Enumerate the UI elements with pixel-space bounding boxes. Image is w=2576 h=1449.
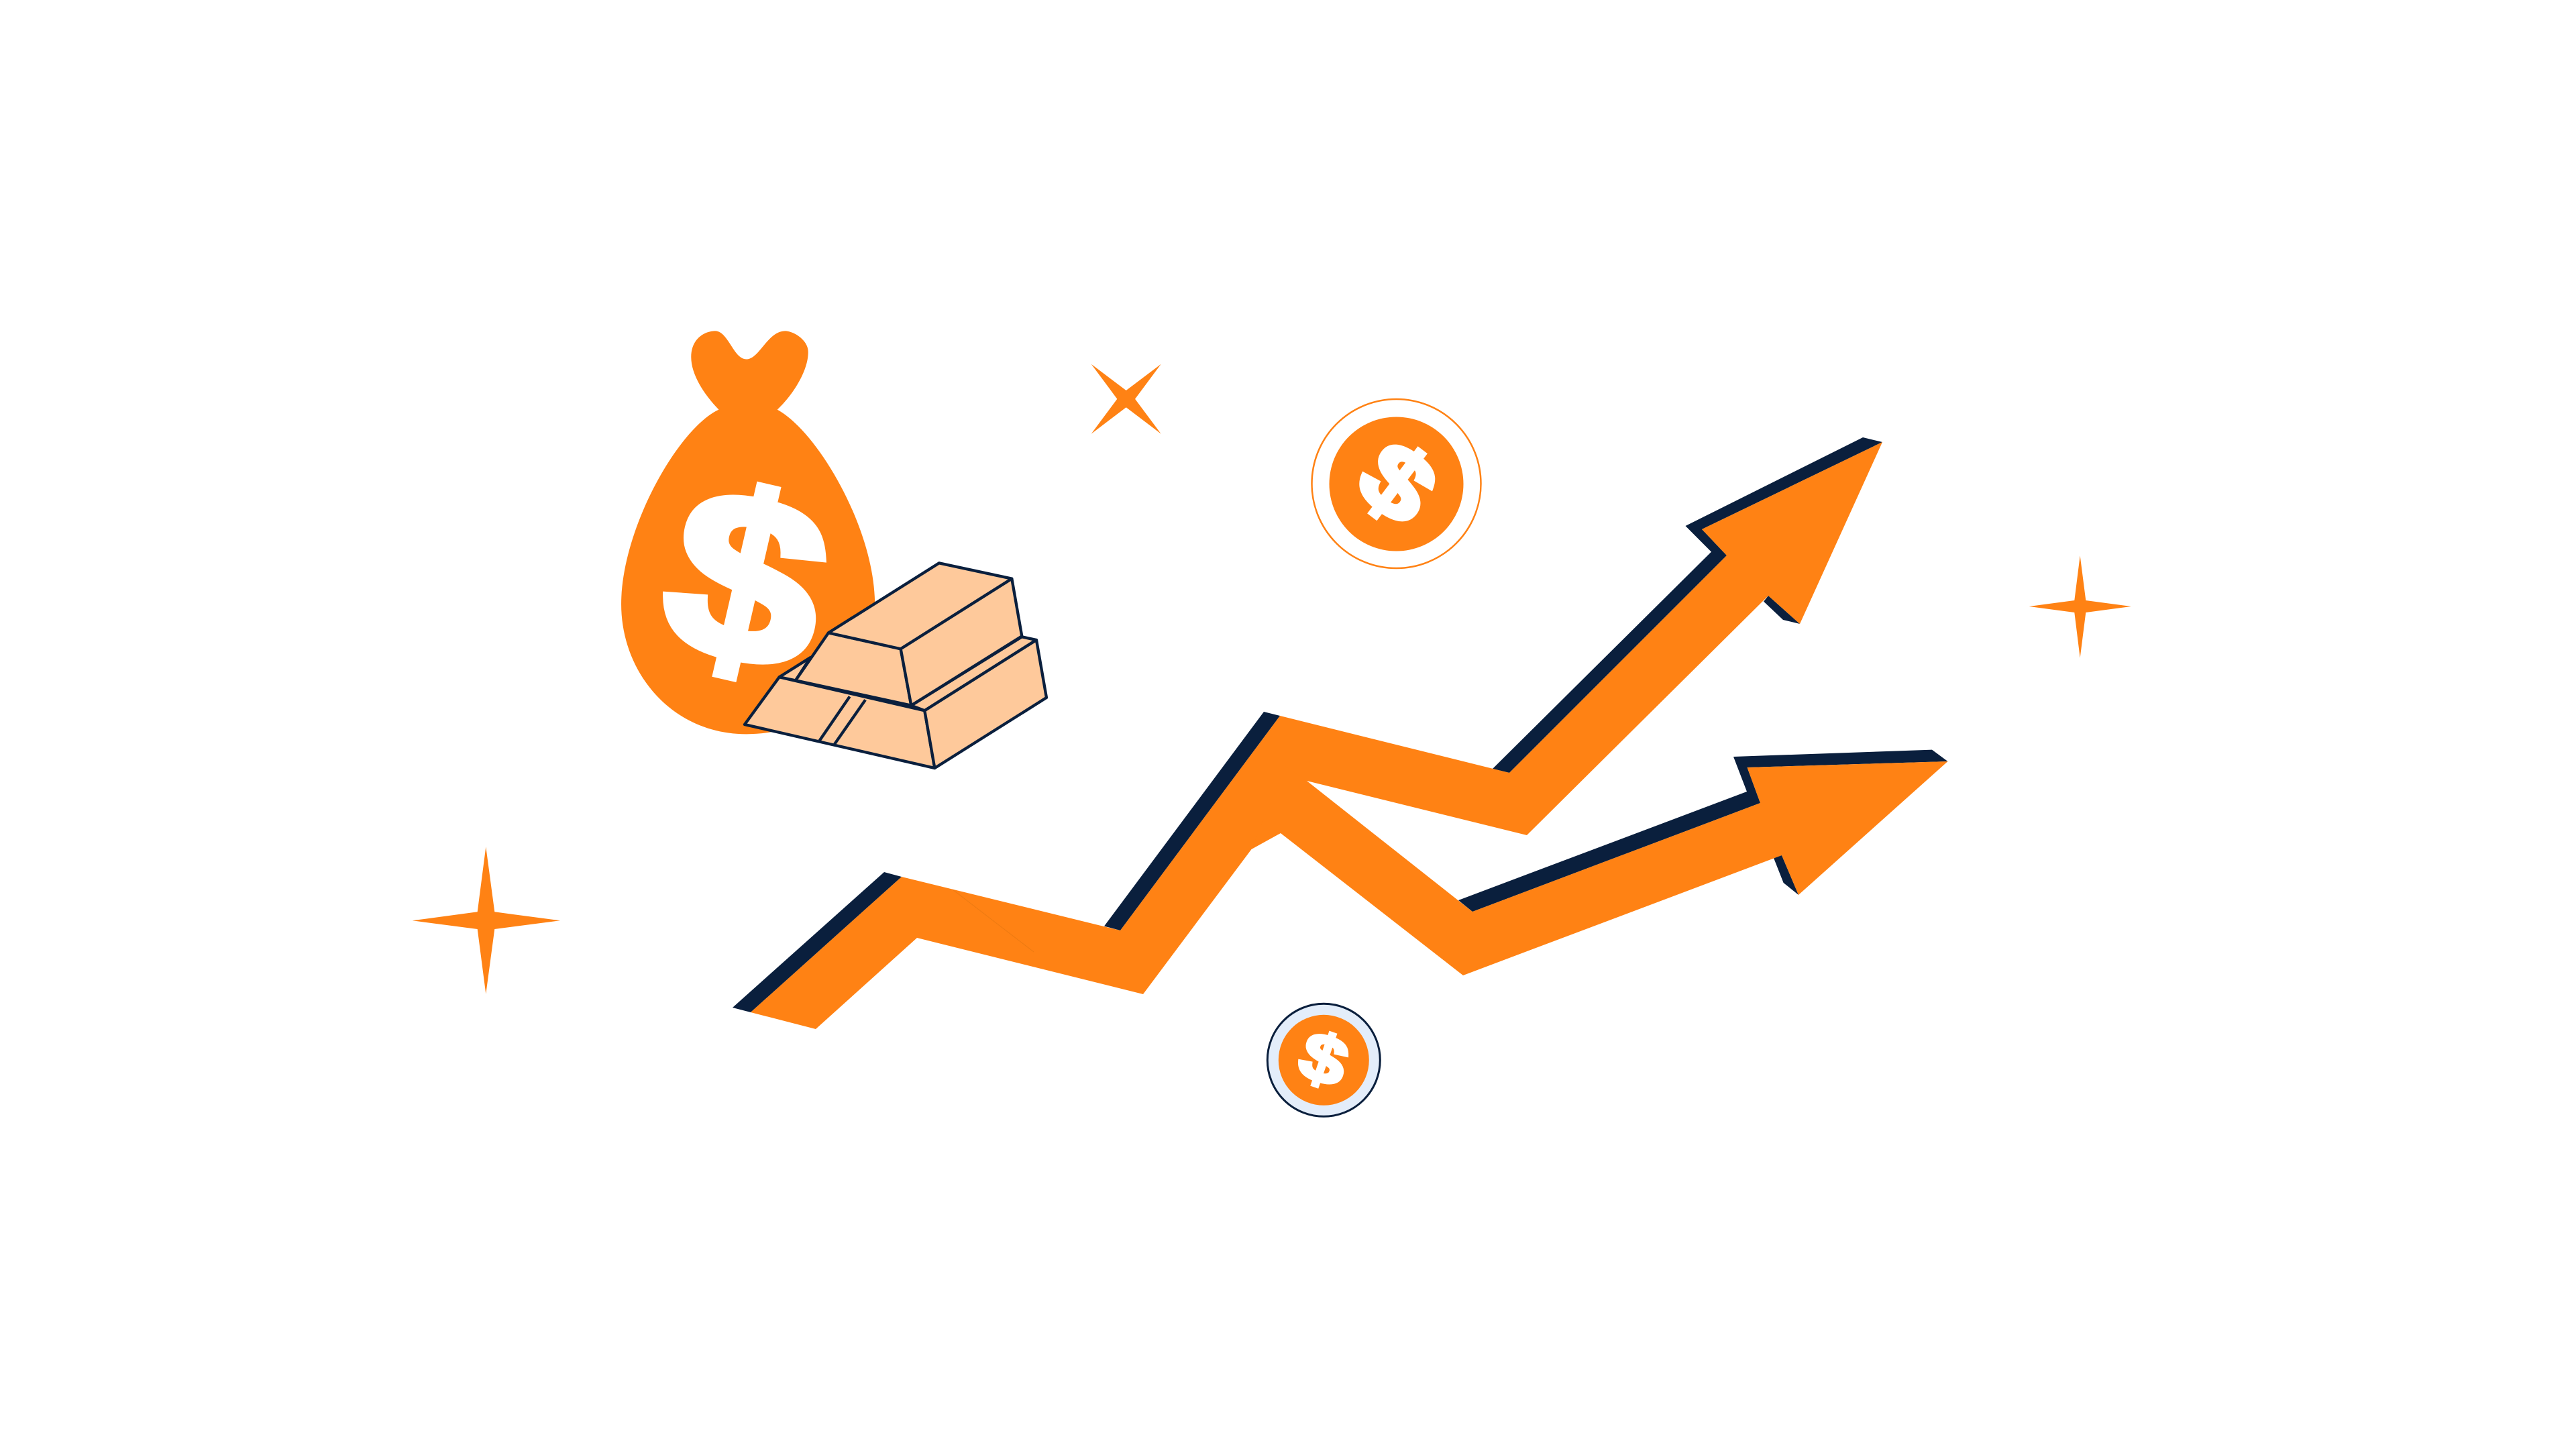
upper gold bar — [796, 563, 1022, 706]
icon: sparkle top centre — [1091, 364, 1161, 434]
icon: money bag with dollar sign — [621, 331, 875, 734]
icon: sparkle right — [2029, 555, 2131, 658]
lower gold bar — [745, 637, 1046, 768]
upper arrow — [751, 442, 1882, 1029]
arrow shadow — [733, 437, 1948, 1012]
fold seam on lower band — [953, 890, 1034, 952]
icon: dollar coin top — [1312, 399, 1481, 568]
dollar sign on top coin: $ — [1338, 420, 1456, 546]
dollar sign on bottom coin: $ — [1290, 1016, 1358, 1102]
lower arrow — [1241, 738, 1948, 975]
icon: stacked gold bars — [745, 563, 1046, 768]
money bag body — [621, 331, 875, 734]
arrow: rising zigzag arrows — [733, 437, 1948, 1029]
dollar sign on bag: $ — [643, 434, 851, 724]
icon: dollar coin bottom — [1267, 1004, 1380, 1116]
icon: sparkle lower left — [413, 847, 560, 994]
